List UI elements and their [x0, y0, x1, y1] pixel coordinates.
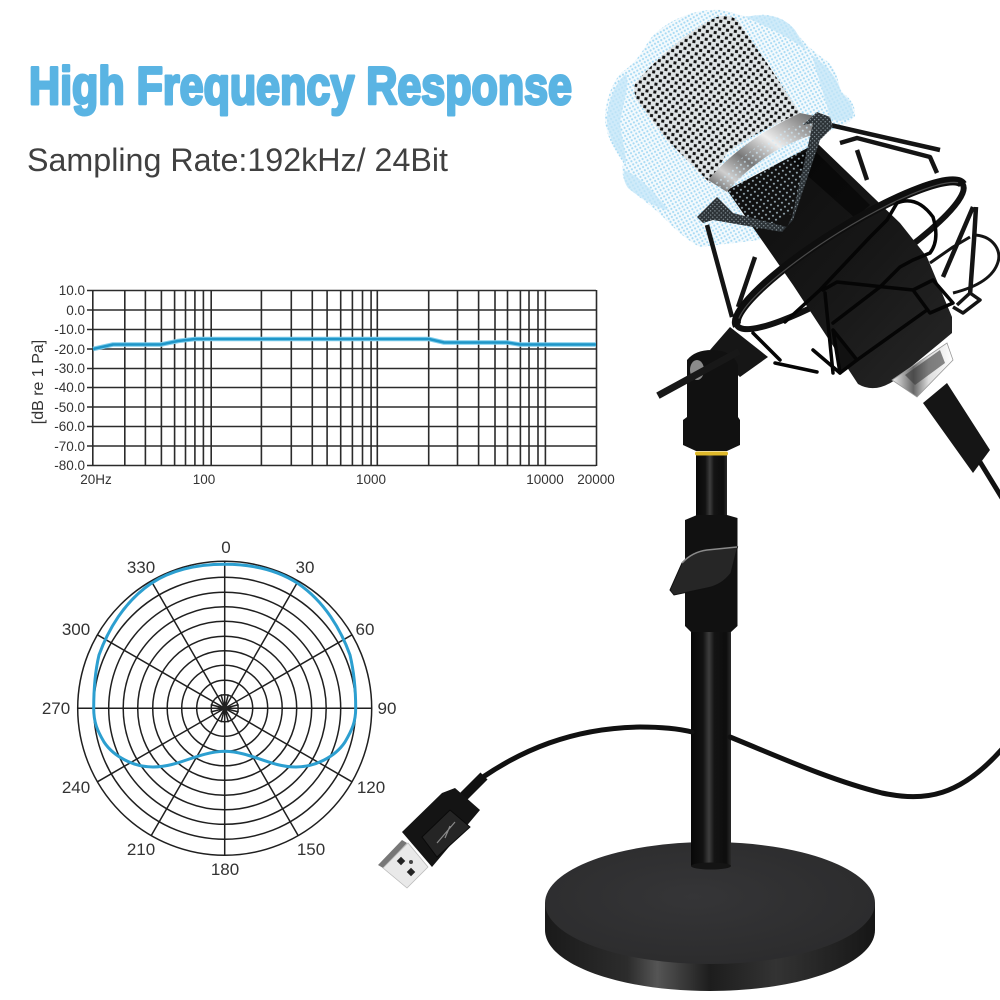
upper pole: [696, 452, 727, 518]
microphone grille: [634, 16, 800, 183]
silver collar ring: [708, 113, 815, 192]
y axis tick labels: -50.0: [54, 400, 85, 415]
frequency response chart: [30, 283, 615, 487]
center hub: [222, 705, 228, 711]
y axis title: [dB re 1 Pa]: [30, 340, 47, 424]
x axis tick labels: [80, 472, 615, 487]
polar spokes: [78, 561, 372, 855]
front shock mount ring: [723, 162, 963, 325]
x axis tick labels: 10000: [526, 472, 564, 487]
cylinder opening tab: [690, 360, 704, 380]
USB metal tip: [383, 843, 428, 888]
stand base: [545, 842, 875, 991]
polar pattern chart: [42, 538, 396, 879]
lower shock mount wires: [753, 201, 953, 373]
rear shock mount ring: [723, 162, 977, 348]
polar rings: [78, 561, 372, 855]
icon: desk stand with base: [545, 452, 875, 991]
USB strain relief: [462, 776, 484, 798]
polar angle labels: [42, 538, 396, 879]
y axis tick labels: [54, 283, 85, 473]
polar angle labels: 60: [356, 620, 374, 639]
icon: USB cable: [378, 727, 1000, 888]
XLR connector: [892, 343, 953, 397]
polar angle labels: 210: [127, 840, 155, 859]
wave dots over collar and body: [712, 118, 818, 235]
polar angle labels: 30: [296, 558, 314, 577]
x axis tick labels: 100: [193, 472, 215, 487]
USB plug housing: [402, 788, 480, 867]
cable exit: [980, 462, 1000, 498]
x axis tick labels: 20Hz: [80, 472, 112, 487]
clamp wing knob: [670, 547, 738, 595]
USB-B plug: [923, 383, 990, 473]
icon: microphone: [634, 16, 1000, 498]
polar angle labels: 0: [221, 538, 231, 557]
polar angle labels: 120: [357, 778, 385, 797]
USB logo panel: [422, 810, 470, 857]
sound wave cloud: [605, 10, 855, 247]
swivel mount block: [710, 327, 768, 377]
y axis tick labels: -30.0: [54, 361, 85, 376]
lower pole: [691, 630, 731, 867]
mount cylinder: [683, 350, 740, 451]
y axis tick labels: -20.0: [54, 342, 85, 357]
denser wave patches: [607, 15, 853, 210]
response curve: [93, 339, 596, 349]
polar angle labels: 90: [378, 699, 396, 718]
y axis tick labels: 0.0: [66, 303, 85, 318]
polar angle labels: 300: [62, 620, 90, 639]
microphone body: [727, 143, 952, 388]
y axis tick labels: 10.0: [59, 283, 85, 298]
y axis tick labels: -40.0: [54, 380, 85, 395]
subtitle: sampling rate: Sampling Rate:192kHz/ 24Bit: [27, 142, 448, 178]
upper mesh elastic band: [697, 112, 833, 232]
USB metal strip: [378, 840, 407, 868]
polar angle labels: 270: [42, 699, 70, 718]
title: High Frequency Response: [29, 57, 572, 116]
yellow ring: [695, 452, 728, 456]
height clamp: [685, 515, 738, 632]
rear shock mount arms: [707, 125, 999, 317]
y axis tick labels: -60.0: [54, 419, 85, 434]
polar angle labels: 330: [127, 558, 155, 577]
body highlight: [790, 148, 870, 218]
chart grid: [87, 290, 596, 466]
polar angle labels: 150: [297, 840, 325, 859]
cable: [483, 727, 1000, 797]
polar angle labels: 240: [62, 778, 90, 797]
polar response curve: [94, 564, 356, 767]
polar angle labels: 180: [211, 860, 239, 879]
y axis tick labels: -70.0: [54, 439, 85, 454]
y axis tick labels: -80.0: [54, 458, 85, 473]
swivel lever: [661, 353, 736, 394]
x axis tick labels: 20000: [577, 472, 615, 487]
x axis tick labels: 1000: [356, 472, 386, 487]
y axis tick labels: -10.0: [54, 322, 85, 337]
